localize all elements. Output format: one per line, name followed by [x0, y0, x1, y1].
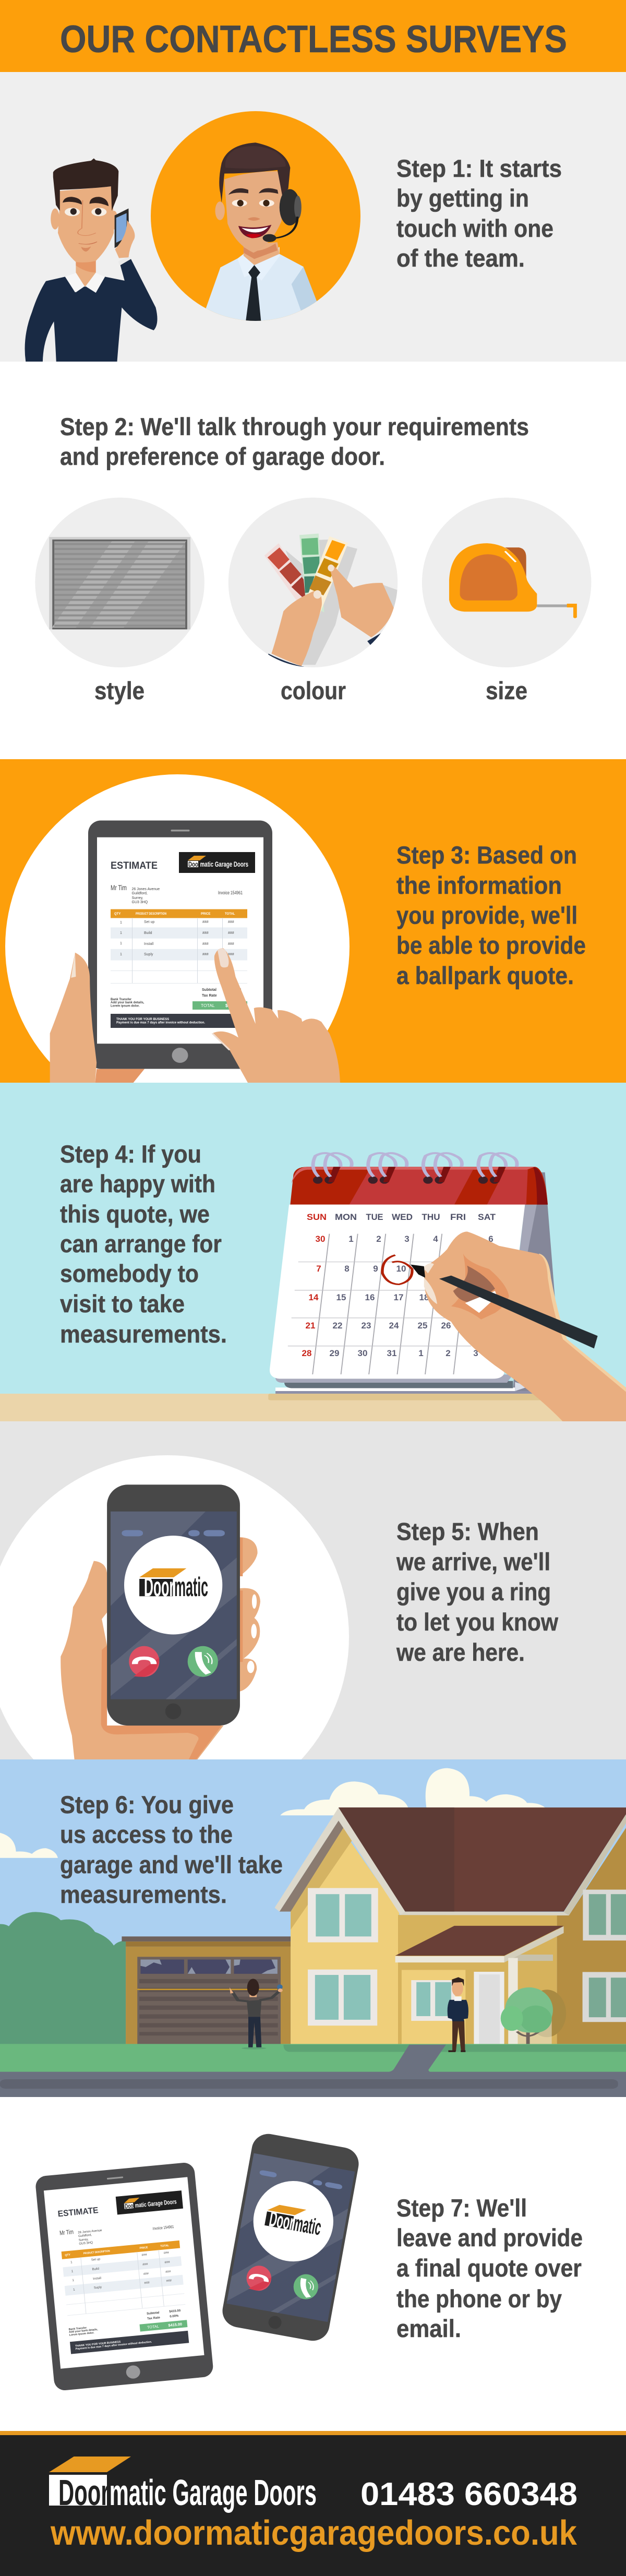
icon: desk calendar: 9	[373, 1264, 378, 1274]
text: step 2 heading: and preference of garage door.	[60, 442, 385, 470]
text: step 1	[396, 154, 562, 272]
panel: step 5	[0, 1421, 626, 1759]
icon: desk calendar: 2	[446, 1348, 451, 1358]
text: step 4: this quote, we	[60, 1200, 210, 1228]
icon: desk calendar: 3	[404, 1234, 410, 1244]
icon: customer on phone	[25, 159, 158, 363]
icon: tilted tablet with final quote: ###	[165, 2270, 171, 2274]
title banner	[0, 0, 626, 72]
icon: desk calendar: SAT	[478, 1212, 496, 1222]
text: step 1: by getting in	[396, 184, 529, 212]
icon: tilted tablet with final quote: TOTAL	[160, 2244, 170, 2248]
icon: tablet with estimate: Build	[144, 931, 152, 935]
panel: step 4	[0, 1083, 626, 1421]
text: step 6: garage and we'll take	[60, 1851, 283, 1878]
text: step 4: can arrange for	[60, 1230, 222, 1257]
illustration: house and garage scene	[0, 1768, 626, 2097]
icon: tilted tablet with final quote: Tax Rate	[147, 2316, 161, 2321]
footer	[0, 2431, 626, 2576]
icon: tablet with estimate: Bank Transfer	[111, 998, 132, 1001]
icon: tilted tablet with final quote: Invoice 154961	[152, 2224, 174, 2231]
text: step 7: leave and provide	[396, 2224, 583, 2251]
icon: desk calendar: 17	[394, 1292, 403, 1302]
icon: tilted phone: Doormatic	[268, 2207, 323, 2240]
website: www.doormaticgaragedoors.co.uk	[50, 2513, 577, 2553]
icon: style garage door	[35, 498, 204, 667]
icon: tilted tablet with final quote: PRODUCT DESCRIPTION	[83, 2250, 110, 2255]
panel: step 1	[0, 72, 626, 363]
icon: desk calendar: THU	[422, 1212, 440, 1222]
icon: desk calendar: 23	[362, 1321, 371, 1331]
icon: tilted tablet with final quote: Build	[92, 2268, 99, 2271]
text: step 5: we arrive, we'll	[396, 1548, 550, 1576]
text: step 5: we are here.	[396, 1638, 525, 1666]
panel: step 2	[35, 417, 592, 704]
text: step 4: visit to take	[60, 1290, 185, 1317]
icon: tilted tablet with final quote: Subtotal	[147, 2311, 160, 2316]
icon: tablet with estimate: Doormatic Garage Doors	[188, 860, 248, 868]
text: step 6: Step 6: You give	[60, 1791, 234, 1818]
text: step 6: measurements.	[60, 1880, 227, 1908]
icon: tilted tablet with final quote: Set up	[91, 2258, 101, 2262]
icon: desk calendar: 6	[488, 1234, 493, 1244]
icon: desk calendar: 26	[441, 1321, 451, 1331]
icon: tilted tablet with final quote: ###	[164, 2261, 171, 2265]
icon: tilted tablet with final quote: GU3 3HQ	[79, 2241, 93, 2246]
icon: tilted tablet with final quote: 1	[70, 2261, 73, 2264]
icon: tablet with estimate: Suply	[144, 953, 153, 956]
icon: desk calendar: FRI	[450, 1212, 466, 1222]
icon: tilted tablet with final quote: 1	[71, 2270, 74, 2273]
label: colour: colour	[281, 677, 346, 704]
icon: tablet with estimate: Payment is due max 7 days after invoice without deduction.	[116, 1022, 205, 1025]
icon: size tape measure	[422, 498, 591, 667]
logo	[49, 2457, 317, 2513]
icon: desk calendar: 30	[358, 1348, 367, 1358]
text: step 4: somebody to	[60, 1260, 199, 1287]
icon: desk calendar: 14	[309, 1292, 319, 1302]
icon: desk calendar: 2	[376, 1234, 381, 1244]
icon: tablet with estimate: Invoice 154961	[218, 890, 243, 895]
label: size: size	[486, 677, 527, 704]
phone number: 01483 660348	[360, 2476, 577, 2512]
icon: tilted tablet with final quote: ###	[164, 2251, 170, 2255]
text: step 7: email.	[396, 2315, 461, 2342]
text: step 5: to let you know	[396, 1608, 558, 1636]
icon: tilted tablet with final quote: Mr Tim	[59, 2228, 74, 2237]
icon: tablet with estimate: PRICE	[201, 913, 210, 916]
text: step 1: of the team.	[396, 244, 525, 272]
icon: desk calendar: 4	[433, 1234, 438, 1244]
icon: tablet with estimate: ###	[228, 920, 234, 924]
text: step 1: touch with one	[396, 214, 553, 242]
text: step 7: the phone or by	[396, 2285, 562, 2313]
icon: orange circle with call-centre agent	[151, 111, 360, 326]
icon: desk calendar: 1	[418, 1348, 424, 1358]
icon: tilted tablet with final quote: ESTIMATE	[57, 2206, 99, 2219]
icon: desk calendar: SUN	[307, 1212, 327, 1222]
icon: tilted tablet with final quote: 26 Jones Avenue	[78, 2229, 102, 2234]
icon: desk calendar: 8	[344, 1264, 350, 1274]
icon: tilted tablet with final quote: 0.00%	[170, 2315, 179, 2318]
icon: desk calendar: 28	[302, 1348, 311, 1358]
icon: desk calendar: 3	[473, 1348, 478, 1358]
text: step 4: are happy with	[60, 1170, 215, 1197]
icon: desk calendar: WED	[392, 1212, 413, 1222]
text: step 3: the information	[396, 871, 562, 899]
icon: tilted tablet with final quote	[35, 2162, 214, 2391]
icon: desk calendar: 18	[419, 1292, 429, 1302]
icon: tablet with estimate: TOTAL	[201, 1003, 215, 1008]
icon: tilted tablet with final quote: $415.00	[168, 2322, 182, 2328]
icon: desk calendar: 7	[316, 1264, 321, 1274]
text: step 5: give you a ring	[396, 1578, 551, 1605]
text: step 7	[396, 2194, 583, 2342]
icon: tablet with estimate: Set up	[144, 920, 154, 924]
logo: Doormatic Garage Doors	[58, 2472, 317, 2513]
icon: tablet with estimate: TOTAL	[225, 913, 235, 916]
text: step 6	[60, 1791, 283, 1908]
icon: tablet with estimate: $415.00	[228, 988, 241, 992]
icon: desk calendar: TUE	[366, 1212, 383, 1222]
icon: desk calendar: 10	[396, 1264, 406, 1274]
icon: tablet with estimate: Surrey,	[131, 896, 143, 900]
panel: step 3	[0, 759, 626, 1083]
icon: tablet with estimate: ###	[228, 953, 234, 956]
icon: tablet with estimate: QTY	[114, 913, 121, 916]
text: step 3	[396, 841, 586, 989]
icon: tablet with estimate: 1	[120, 953, 122, 956]
icon: tilted tablet with final quote: Payment is due max 7 days after invoice without deduction.	[76, 2340, 152, 2351]
icon: tilted tablet with final quote: PRICE	[139, 2246, 148, 2250]
icon: tablet with estimate	[88, 820, 272, 1069]
icon: tablet with estimate: 1	[120, 931, 122, 935]
white circle backdrop	[5, 774, 350, 1083]
icon: tablet with estimate: 26 Jones Avenue	[131, 888, 160, 891]
icon: tilted tablet with final quote: TOTAL	[147, 2324, 159, 2330]
text: step 2 heading: Step 2: We'll talk through your requirements	[60, 413, 529, 440]
icon: tablet with estimate: 1	[120, 921, 122, 925]
icon: tablet with estimate: ###	[202, 920, 209, 924]
icon: colour swatches in hands	[228, 498, 398, 668]
icon: tilted tablet with final quote: Add your bank details,	[69, 2328, 98, 2334]
text: step 5: Step 5: When	[396, 1517, 539, 1545]
icon: tablet with estimate: Install	[144, 942, 154, 946]
icon: tablet with estimate: THANK YOU FOR YOUR BUSINESS	[116, 1018, 169, 1021]
text: step 3: you provide, we'll	[396, 902, 577, 929]
text: step 5	[396, 1517, 558, 1666]
icon: desk calendar: 30	[316, 1234, 325, 1244]
icon: tablet with estimate: Subtotal	[202, 988, 216, 992]
text: step 7: a final quote over	[396, 2254, 582, 2282]
icon: desk calendar: 25	[418, 1321, 427, 1331]
icon: tablet with estimate: Tax Rate	[202, 994, 217, 998]
panel: step 7	[35, 2134, 582, 2390]
text: step 1: Step 1: It starts	[396, 154, 562, 182]
icon: desk calendar	[268, 1153, 559, 1400]
icon: tablet with estimate: Lorem ipsum dolor.	[111, 1005, 140, 1008]
icon: tablet with estimate: Add your bank details,	[111, 1001, 145, 1004]
icon: desk calendar: 21	[306, 1321, 315, 1331]
icon: tablet with estimate: $415.00	[225, 1003, 242, 1008]
text: step 6: us access to the	[60, 1820, 233, 1848]
icon: tablet with estimate: ESTIMATE	[111, 860, 158, 871]
icon: tablet with estimate: ###	[228, 931, 234, 935]
icon: tablet with estimate: ###	[228, 942, 234, 946]
icon: tilted tablet with final quote: 1	[72, 2279, 75, 2282]
icon: hand with pen circling date	[382, 1231, 626, 1421]
icon: tablet with estimate: ###	[202, 931, 209, 935]
icon: desk calendar: 16	[365, 1292, 375, 1302]
icon: tilted tablet with final quote: Suply	[94, 2286, 102, 2290]
icon: tilted tablet with final quote: Doormatic Garage Doors	[125, 2198, 177, 2210]
icon: desk calendar: MON	[335, 1212, 357, 1222]
white circle backdrop	[0, 1455, 349, 1759]
icon: desk calendar: 24	[389, 1321, 399, 1331]
label: style: style	[94, 677, 145, 704]
icon: desk calendar: 1	[348, 1234, 354, 1244]
icon: hands holding tablet	[50, 948, 340, 1084]
text: step 3: be able to provide	[396, 931, 586, 959]
title banner: OUR CONTACTLESS SURVEYS	[60, 18, 567, 61]
icon: tablet with estimate: 1	[120, 942, 122, 945]
icon: tablet with estimate: GU3 3HQ	[131, 901, 148, 904]
icon: tilted tablet with final quote: Lorem ipsum dolor.	[69, 2331, 95, 2337]
icon: tilted tablet with final quote: ###	[141, 2254, 148, 2257]
icon: tablet with estimate: Mr Tim	[111, 883, 127, 892]
text: step 3: Step 3: Based on	[396, 841, 577, 869]
icon: tablet with estimate: PRODUCT DESCRIPTION	[136, 913, 166, 916]
icon: tilted tablet with final quote: ###	[142, 2263, 148, 2267]
icon: tilted phone	[220, 2131, 362, 2343]
icon: desk calendar: 22	[333, 1321, 342, 1331]
icon: tablet with estimate: Guildford,	[131, 892, 148, 895]
text: step 7: Step 7: We'll	[396, 2194, 527, 2222]
icon: desk calendar: 29	[330, 1348, 339, 1358]
panel: step 6	[0, 1759, 626, 2097]
text: step 4: Step 4: If you	[60, 1140, 201, 1168]
text: step 4: measurements.	[60, 1320, 227, 1348]
icon: tilted tablet with final quote: $415.00	[169, 2309, 181, 2314]
icon: tilted tablet with final quote: Guildford,	[78, 2234, 92, 2238]
icon: tilted tablet with final quote: 1	[73, 2289, 76, 2292]
icon: desk calendar: 15	[336, 1292, 346, 1302]
icon: tilted tablet with final quote: Surrey,	[79, 2238, 89, 2242]
icon: tilted tablet with final quote: THANK YOU FOR YOUR BUSINESS	[75, 2340, 121, 2348]
icon: tilted tablet with final quote: ###	[143, 2272, 149, 2276]
icon: tablet with estimate: 0.00%	[228, 994, 239, 998]
icon: tablet with estimate: ###	[202, 953, 209, 956]
icon: tilted tablet with final quote: ###	[144, 2281, 150, 2285]
text: step 2 heading	[60, 413, 529, 470]
icon: hand holding ringing phone: Doormatic	[144, 1572, 208, 1602]
text: step 3: a ballpark quote.	[396, 962, 574, 989]
text: step 4	[60, 1140, 227, 1348]
icon: tilted tablet with final quote: QTY	[65, 2254, 71, 2257]
icon: desk calendar: 31	[387, 1348, 396, 1358]
icon: tablet with estimate: ###	[202, 942, 209, 946]
icon: tilted tablet with final quote: ###	[166, 2279, 172, 2283]
icon: tilted tablet with final quote: Install	[93, 2277, 101, 2281]
icon: tilted tablet with final quote: Bank Transfer	[68, 2327, 87, 2331]
icon: hand holding ringing phone	[61, 1484, 260, 1762]
